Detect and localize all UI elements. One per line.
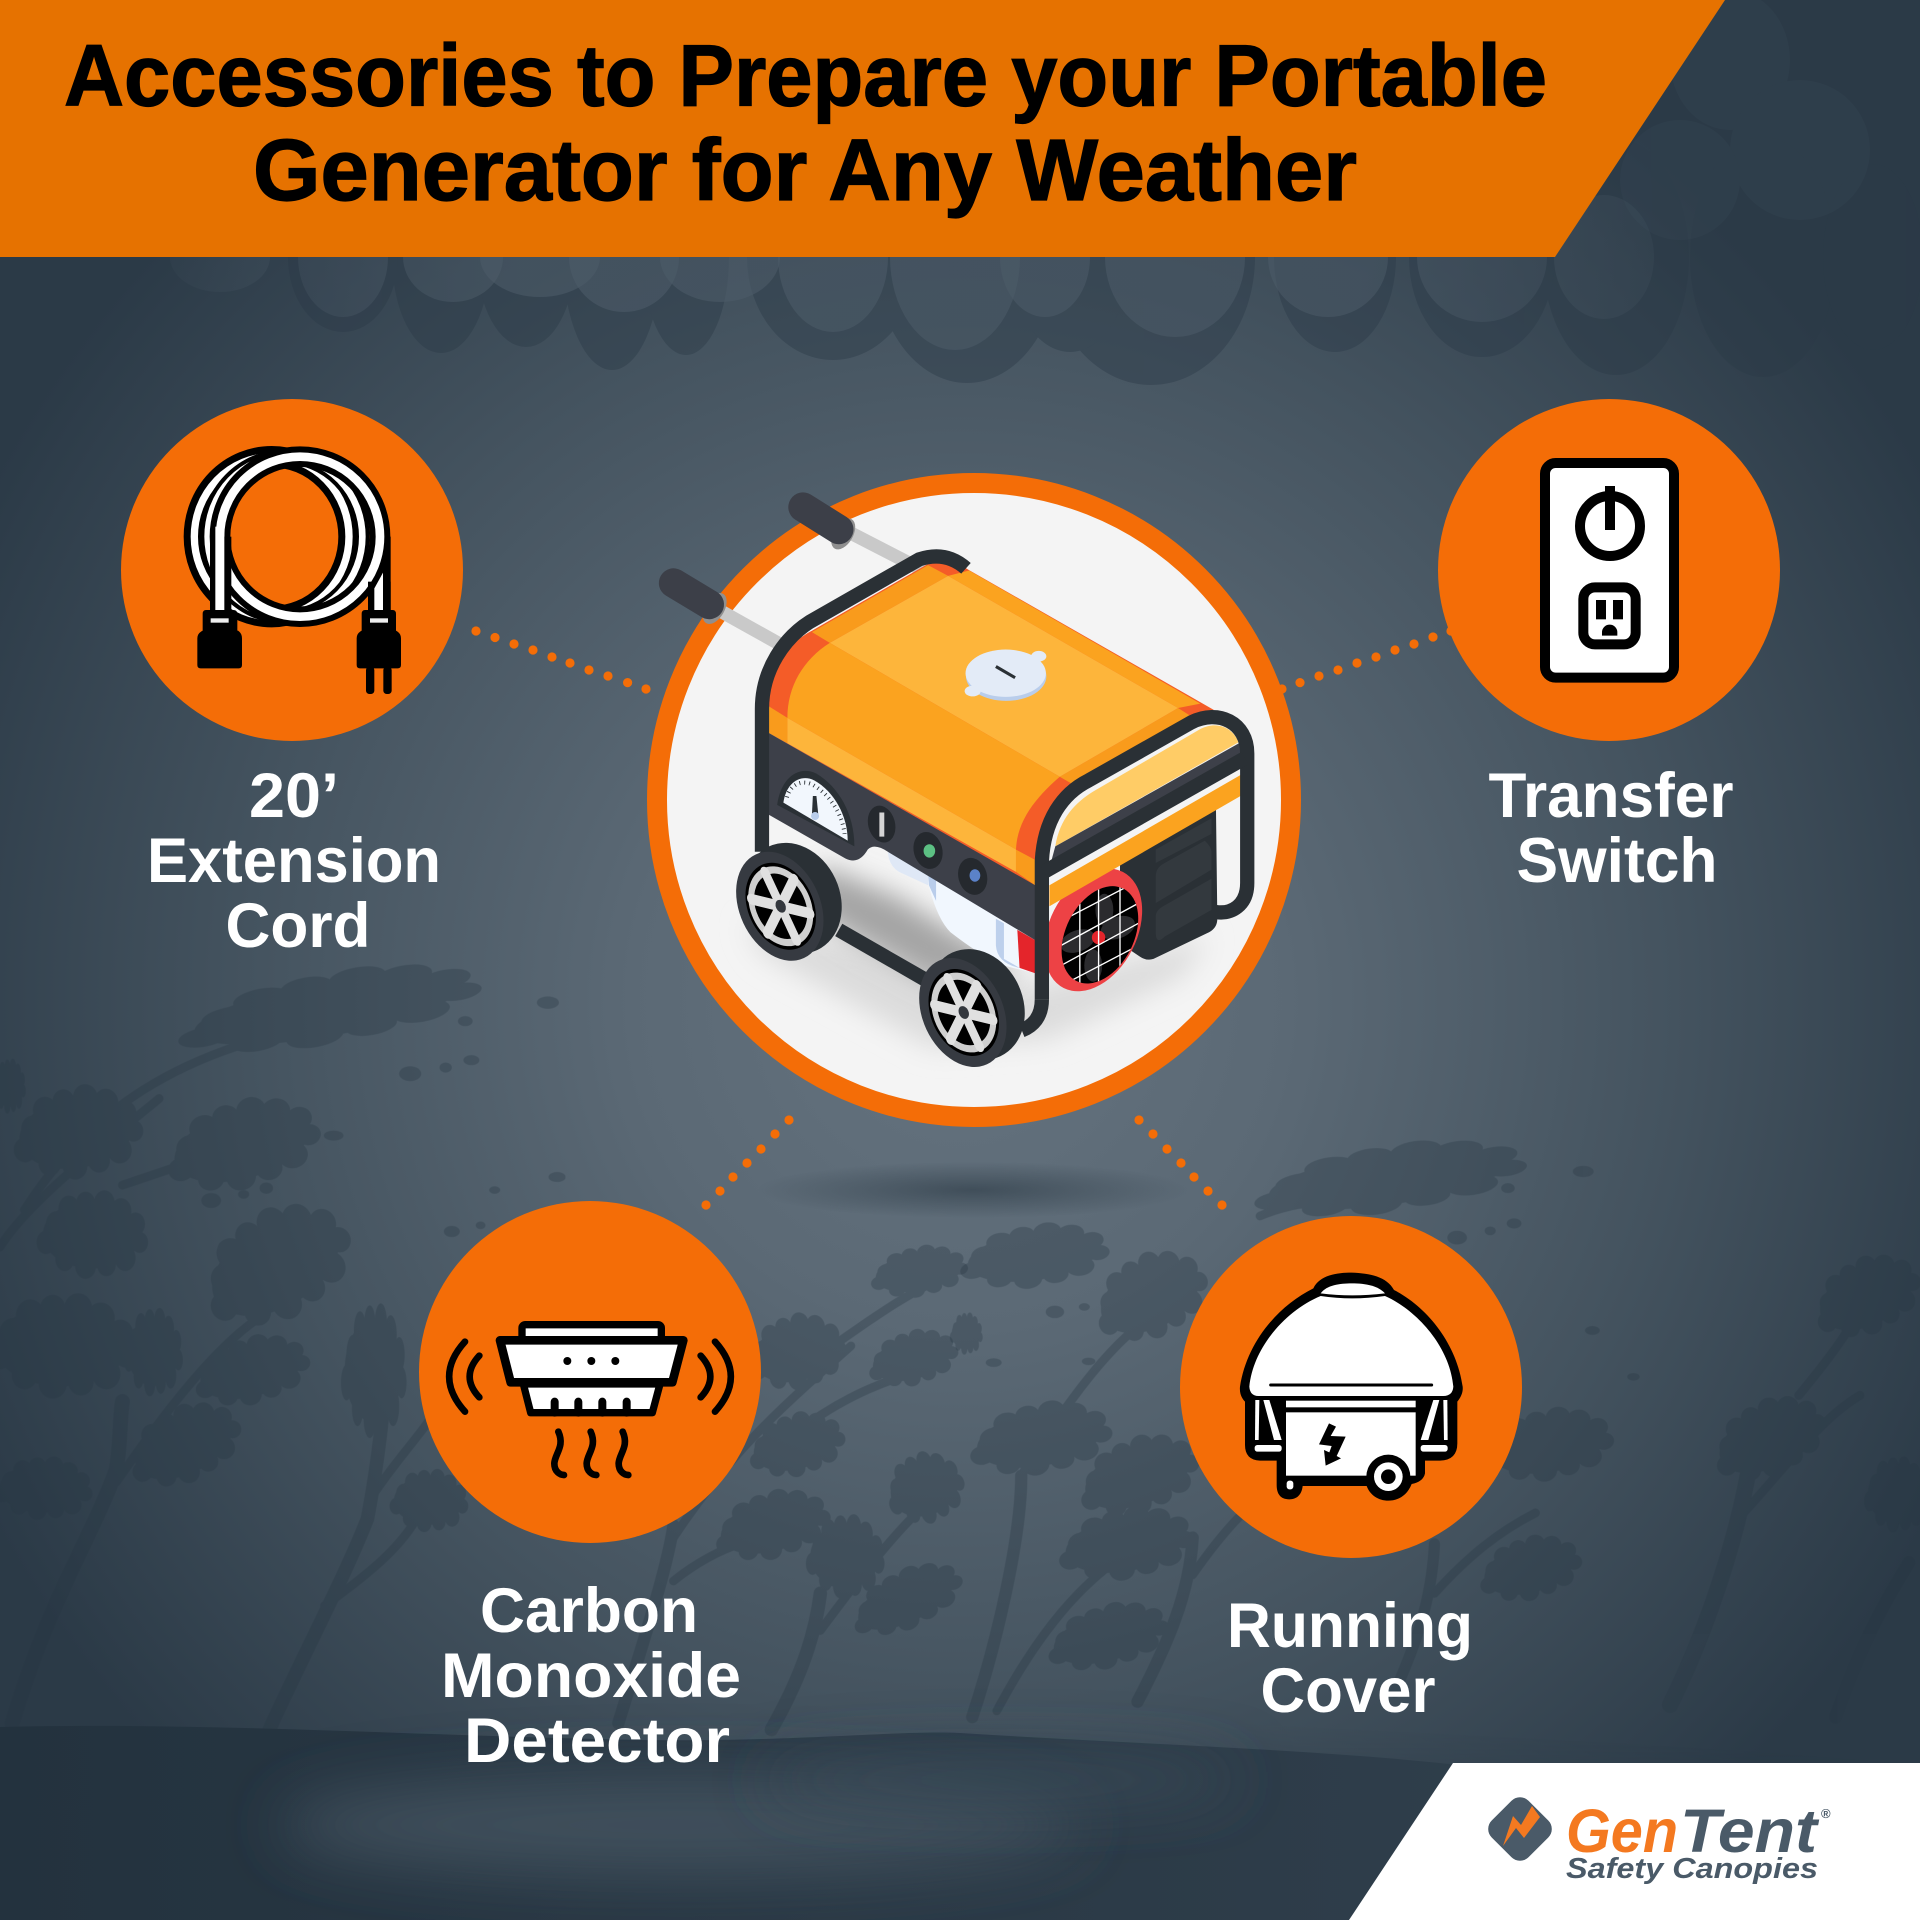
logo wordmark [1566, 1797, 1831, 1885]
wind-blown trees right [950, 1126, 1920, 1717]
tubular frame [762, 556, 1247, 1030]
wheels [719, 827, 1042, 1081]
icon: running cover [1240, 1273, 1463, 1501]
shadow under generator [758, 1162, 1188, 1218]
icon circle: extension cord [121, 399, 463, 741]
lid [767, 562, 1214, 885]
fuel tank [888, 850, 1035, 973]
title banner [0, 0, 1725, 257]
logo icon [1483, 1792, 1557, 1866]
label: 20' extension cord: 20’ [249, 761, 339, 831]
end panel [1049, 725, 1241, 906]
label: running cover: Cover [1260, 1656, 1436, 1726]
logo wordmark: Gen [1566, 1797, 1678, 1865]
label: transfer switch: Transfer [1488, 761, 1734, 831]
footer logo panel [1349, 1763, 1920, 1920]
storm clouds [170, 0, 1920, 385]
label: 20' extension cord: Extension [147, 826, 441, 896]
icon circle: carbon monoxide detector [419, 1201, 761, 1543]
handles [674, 507, 924, 651]
label: carbon monoxide detector: Monoxide [441, 1641, 741, 1711]
icon circle: transfer switch [1438, 399, 1780, 741]
label: running cover: Running [1227, 1591, 1473, 1661]
title text [64, 28, 1547, 219]
control panel [767, 732, 1035, 940]
title text: Generator for Any Weather [253, 122, 1357, 219]
label: running cover [1227, 1591, 1473, 1726]
title text: Accessories to Prepare your Portable [64, 28, 1547, 124]
icon: detector [449, 1325, 731, 1475]
fuel cap [965, 650, 1046, 701]
engine block [1120, 809, 1217, 960]
icon: extension cord [194, 457, 401, 694]
label: transfer switch [1488, 761, 1734, 896]
icon circle: running cover [1180, 1216, 1522, 1558]
generator illustration [674, 507, 1247, 1081]
blue light [954, 855, 991, 898]
dotted connector: transfer switch [1277, 626, 1456, 694]
label: carbon monoxide detector: Carbon [480, 1576, 698, 1646]
logo wordmark: ® [1821, 1806, 1831, 1821]
green light [909, 829, 947, 872]
dotted connector: extension cord [471, 626, 651, 694]
label: 20' extension cord [147, 761, 441, 961]
icon: transfer switch [1545, 463, 1674, 678]
label: transfer switch: Switch [1516, 826, 1718, 896]
logo wordmark: Safety Canopies [1566, 1853, 1818, 1885]
dotted connector: running cover [1134, 1115, 1227, 1210]
label: carbon monoxide detector: Detector [464, 1706, 730, 1776]
fan [1049, 869, 1142, 992]
switch [864, 803, 899, 846]
dotted connector: detector [701, 1115, 794, 1210]
ground [0, 1723, 1920, 1920]
gauge [777, 771, 854, 846]
label: carbon monoxide detector [441, 1576, 741, 1776]
central generator badge [657, 483, 1291, 1117]
label: 20' extension cord: Cord [226, 891, 370, 961]
logo wordmark: Tent [1680, 1797, 1820, 1865]
wind-blown trees left [0, 946, 974, 1729]
